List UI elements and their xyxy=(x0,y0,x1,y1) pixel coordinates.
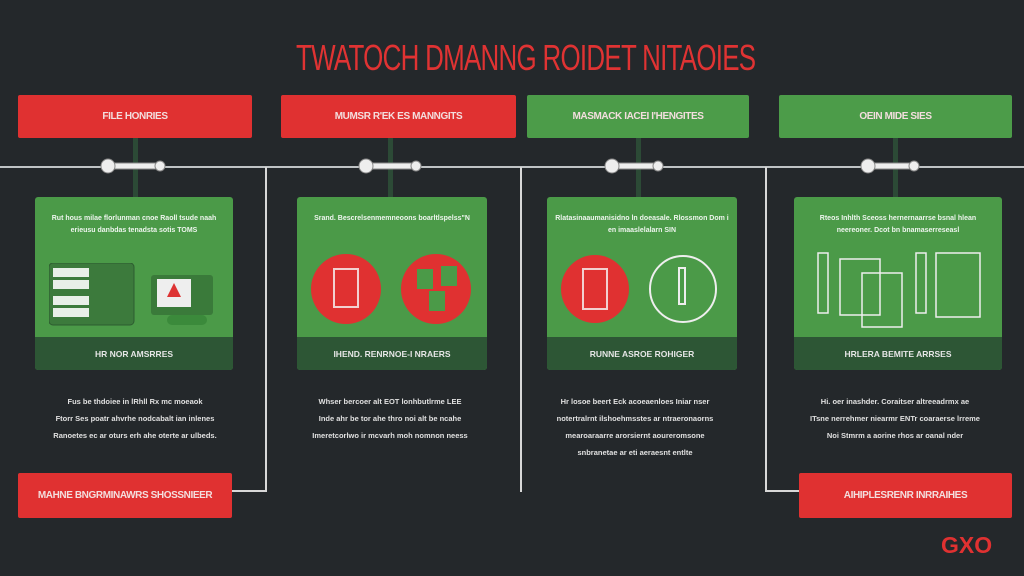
callout box left: MAHNE BNGRMINAWRS SHOSSNIEER xyxy=(38,490,212,501)
panel 4 xyxy=(794,197,1002,370)
text block 4: Hi. oer inashder. Coraitser altreeadrmx ae xyxy=(821,397,969,406)
panel 2: Srand. Bescrelsenmemneoons boarltlspelss"N xyxy=(314,215,470,222)
callout box right xyxy=(799,473,1012,518)
text block 2: Imeretcorlwo ir mcvarh moh nomnon neess xyxy=(312,431,468,440)
panel 1: HR NOR AMSRRES xyxy=(95,348,173,358)
text block 3: snbranetae ar eti aeraesnt entlte xyxy=(577,448,693,457)
text block 1: Fus be thdoiee in lRhll Rx mc moeaok xyxy=(67,397,203,406)
text block 1: Ftorr Ses poatr ahvrhe nodcabalt ian inlenes xyxy=(56,414,214,423)
text block 4: ITsne nerrehmer niearmr ENTr coaraerse lrreme xyxy=(810,414,980,423)
text block 3: mearoaraarre arorsiernt aoureromsone xyxy=(565,431,705,440)
text block 1 xyxy=(53,397,217,440)
panel 2 xyxy=(297,197,487,370)
icons: red circles xyxy=(311,254,471,324)
panel 1: Rut hous milae florlunman cnoe Raoll tsude naah erieusu danbdas tenadsta sotis TOMS xyxy=(52,215,216,234)
header: 3: MASMACK IACEI I'HENGITES xyxy=(572,111,704,122)
callout box right: AIHIPLESRENR INRRAIHES xyxy=(844,490,967,501)
panel 3 xyxy=(547,197,737,370)
logo: GXO xyxy=(941,532,992,558)
connector nodes xyxy=(100,158,920,174)
stems xyxy=(133,138,138,197)
icons: circles xyxy=(561,255,717,323)
timeline line xyxy=(0,166,1024,168)
connector lines xyxy=(265,167,267,492)
panel 3: RUNNE ASROE ROHIGER xyxy=(590,348,694,358)
header: 2 xyxy=(281,95,516,138)
text block 4 xyxy=(810,397,980,440)
text block 1: Ranoetes ec ar oturs erh ahe oterte ar ulbeds. xyxy=(53,431,217,440)
header: 4 xyxy=(779,95,1012,138)
text block 2: Inde ahr be tor ahe thro noi alt be ncahe xyxy=(319,414,461,423)
text block 3: Hr losoe beert Eck acoeaenloes Iniar nser xyxy=(561,397,709,406)
header: 1: FILE HONRIES xyxy=(102,111,168,122)
text block 4: Noi Stmrm a aorine rhos ar oanal nder xyxy=(827,431,963,440)
panel 1 xyxy=(35,197,233,370)
header: 1 xyxy=(18,95,252,138)
header: 4: OEIN MIDE SIES xyxy=(859,111,932,122)
panel 3: Rlatasinaaumanisidno ln doeasale. Rlossmon Dom i en imaaslelalarn SIN xyxy=(555,215,729,234)
text block 3 xyxy=(557,397,713,457)
text block 2: Whser bercoer alt EOT lonhbutlrme LEE xyxy=(319,397,461,406)
header: 3 xyxy=(527,95,749,138)
panel 4: Rteos Inhlth Sceoss hernernaarrse bsnal hlean neereoner. Dcot bn bnamaserreseasl xyxy=(820,215,976,234)
title: TWATOCH DMANNG ROIDET NITAOIES xyxy=(296,37,755,78)
icons: documents xyxy=(817,252,981,328)
text block 3: notertralrnt ilshoehmsstes ar ntraeronaorns xyxy=(557,414,713,423)
icon: server xyxy=(49,263,213,326)
callout box left xyxy=(18,473,232,518)
panel 2: IHEND. RENRNOE-I NRAERS xyxy=(333,348,451,358)
panel 4: HRLERA BEMITE ARRSES xyxy=(844,348,952,358)
header: 2: MUMSR R'EK ES MANNGITS xyxy=(335,111,462,122)
text block 2 xyxy=(312,397,468,440)
